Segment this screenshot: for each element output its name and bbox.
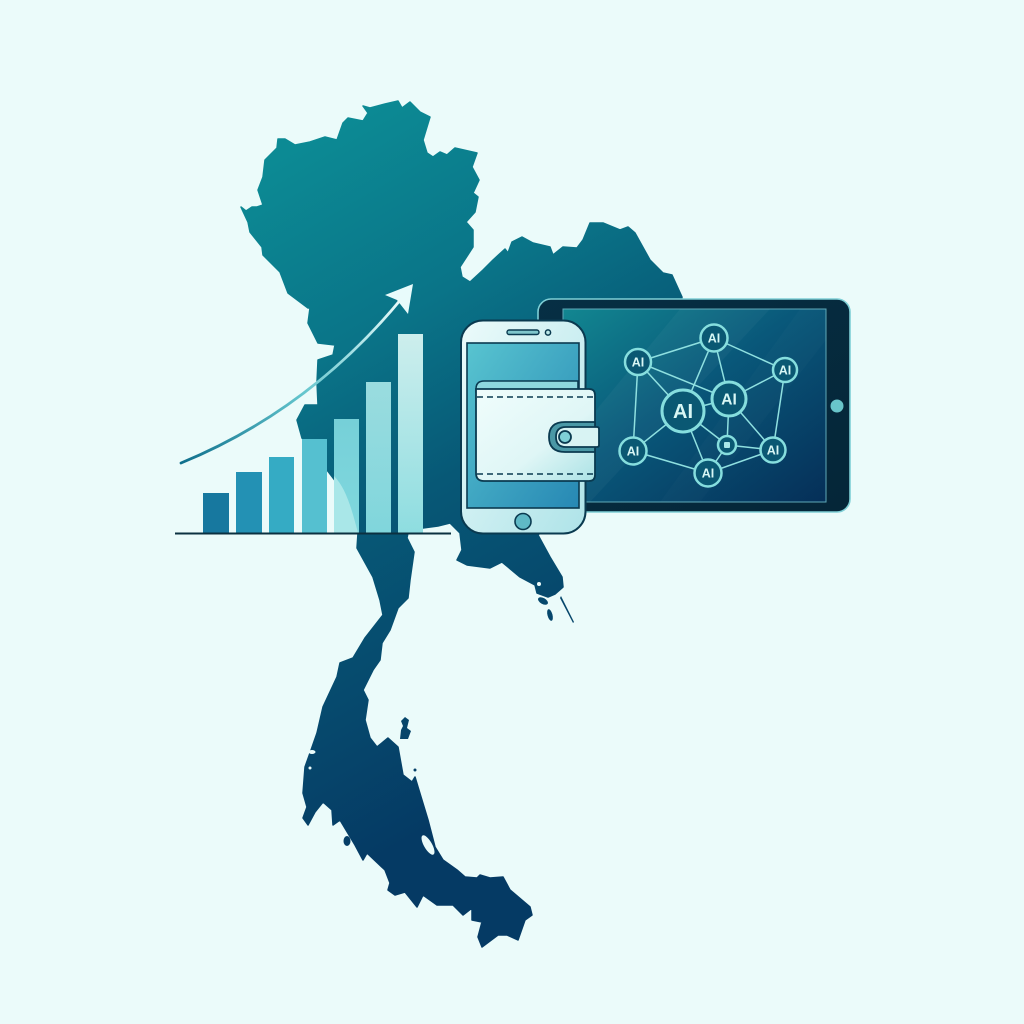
tablet with AI network [538,299,850,512]
phone home button [515,514,531,530]
arrow: growth trend [181,284,413,463]
AI node labels: AI [779,364,791,378]
AI node labels: AI [632,356,644,370]
map lake and coastal holes [308,582,541,857]
wallet [476,381,599,481]
AI node labels [627,332,791,480]
AI node labels: AI [673,401,693,423]
bar chart: rising bars on a baseline [175,334,451,534]
smartphone [461,320,586,534]
AI node labels: AI [708,332,720,346]
phone speaker and camera [507,330,539,334]
AI node labels: AI [627,444,639,458]
AI node labels: AI [767,444,779,458]
AI network nodes [620,324,797,486]
tablet home button [830,400,844,412]
AI node labels: AI [702,466,714,480]
AI network links [633,338,785,473]
AI node labels: AI [721,392,737,408]
wallet clasp [549,422,595,452]
map: Thailand silhouette [241,101,682,947]
